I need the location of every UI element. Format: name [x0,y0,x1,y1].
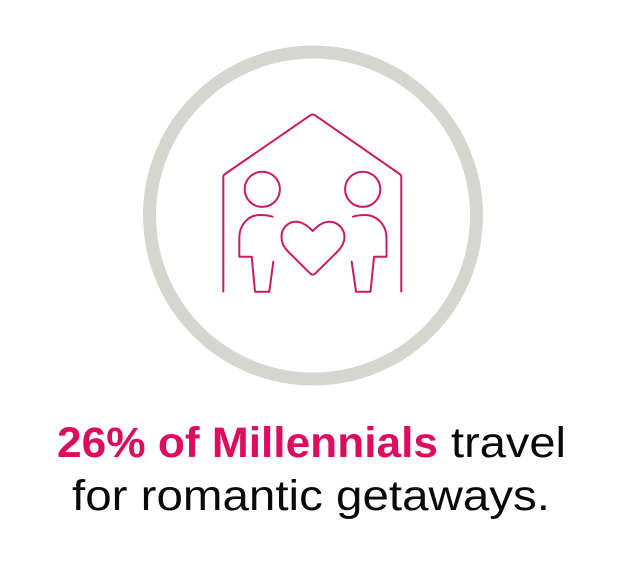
caption second line: for romantic getaways. [72,472,550,520]
caption [57,419,566,520]
caption highlight: 26% of Millennials [57,419,438,467]
left person [239,172,280,292]
house outline [223,114,401,292]
grey circle ring [150,52,476,379]
heart [282,222,344,275]
right person [345,172,386,292]
caption first line end: travel [451,419,566,467]
icon: couple and heart inside a house [223,114,401,292]
